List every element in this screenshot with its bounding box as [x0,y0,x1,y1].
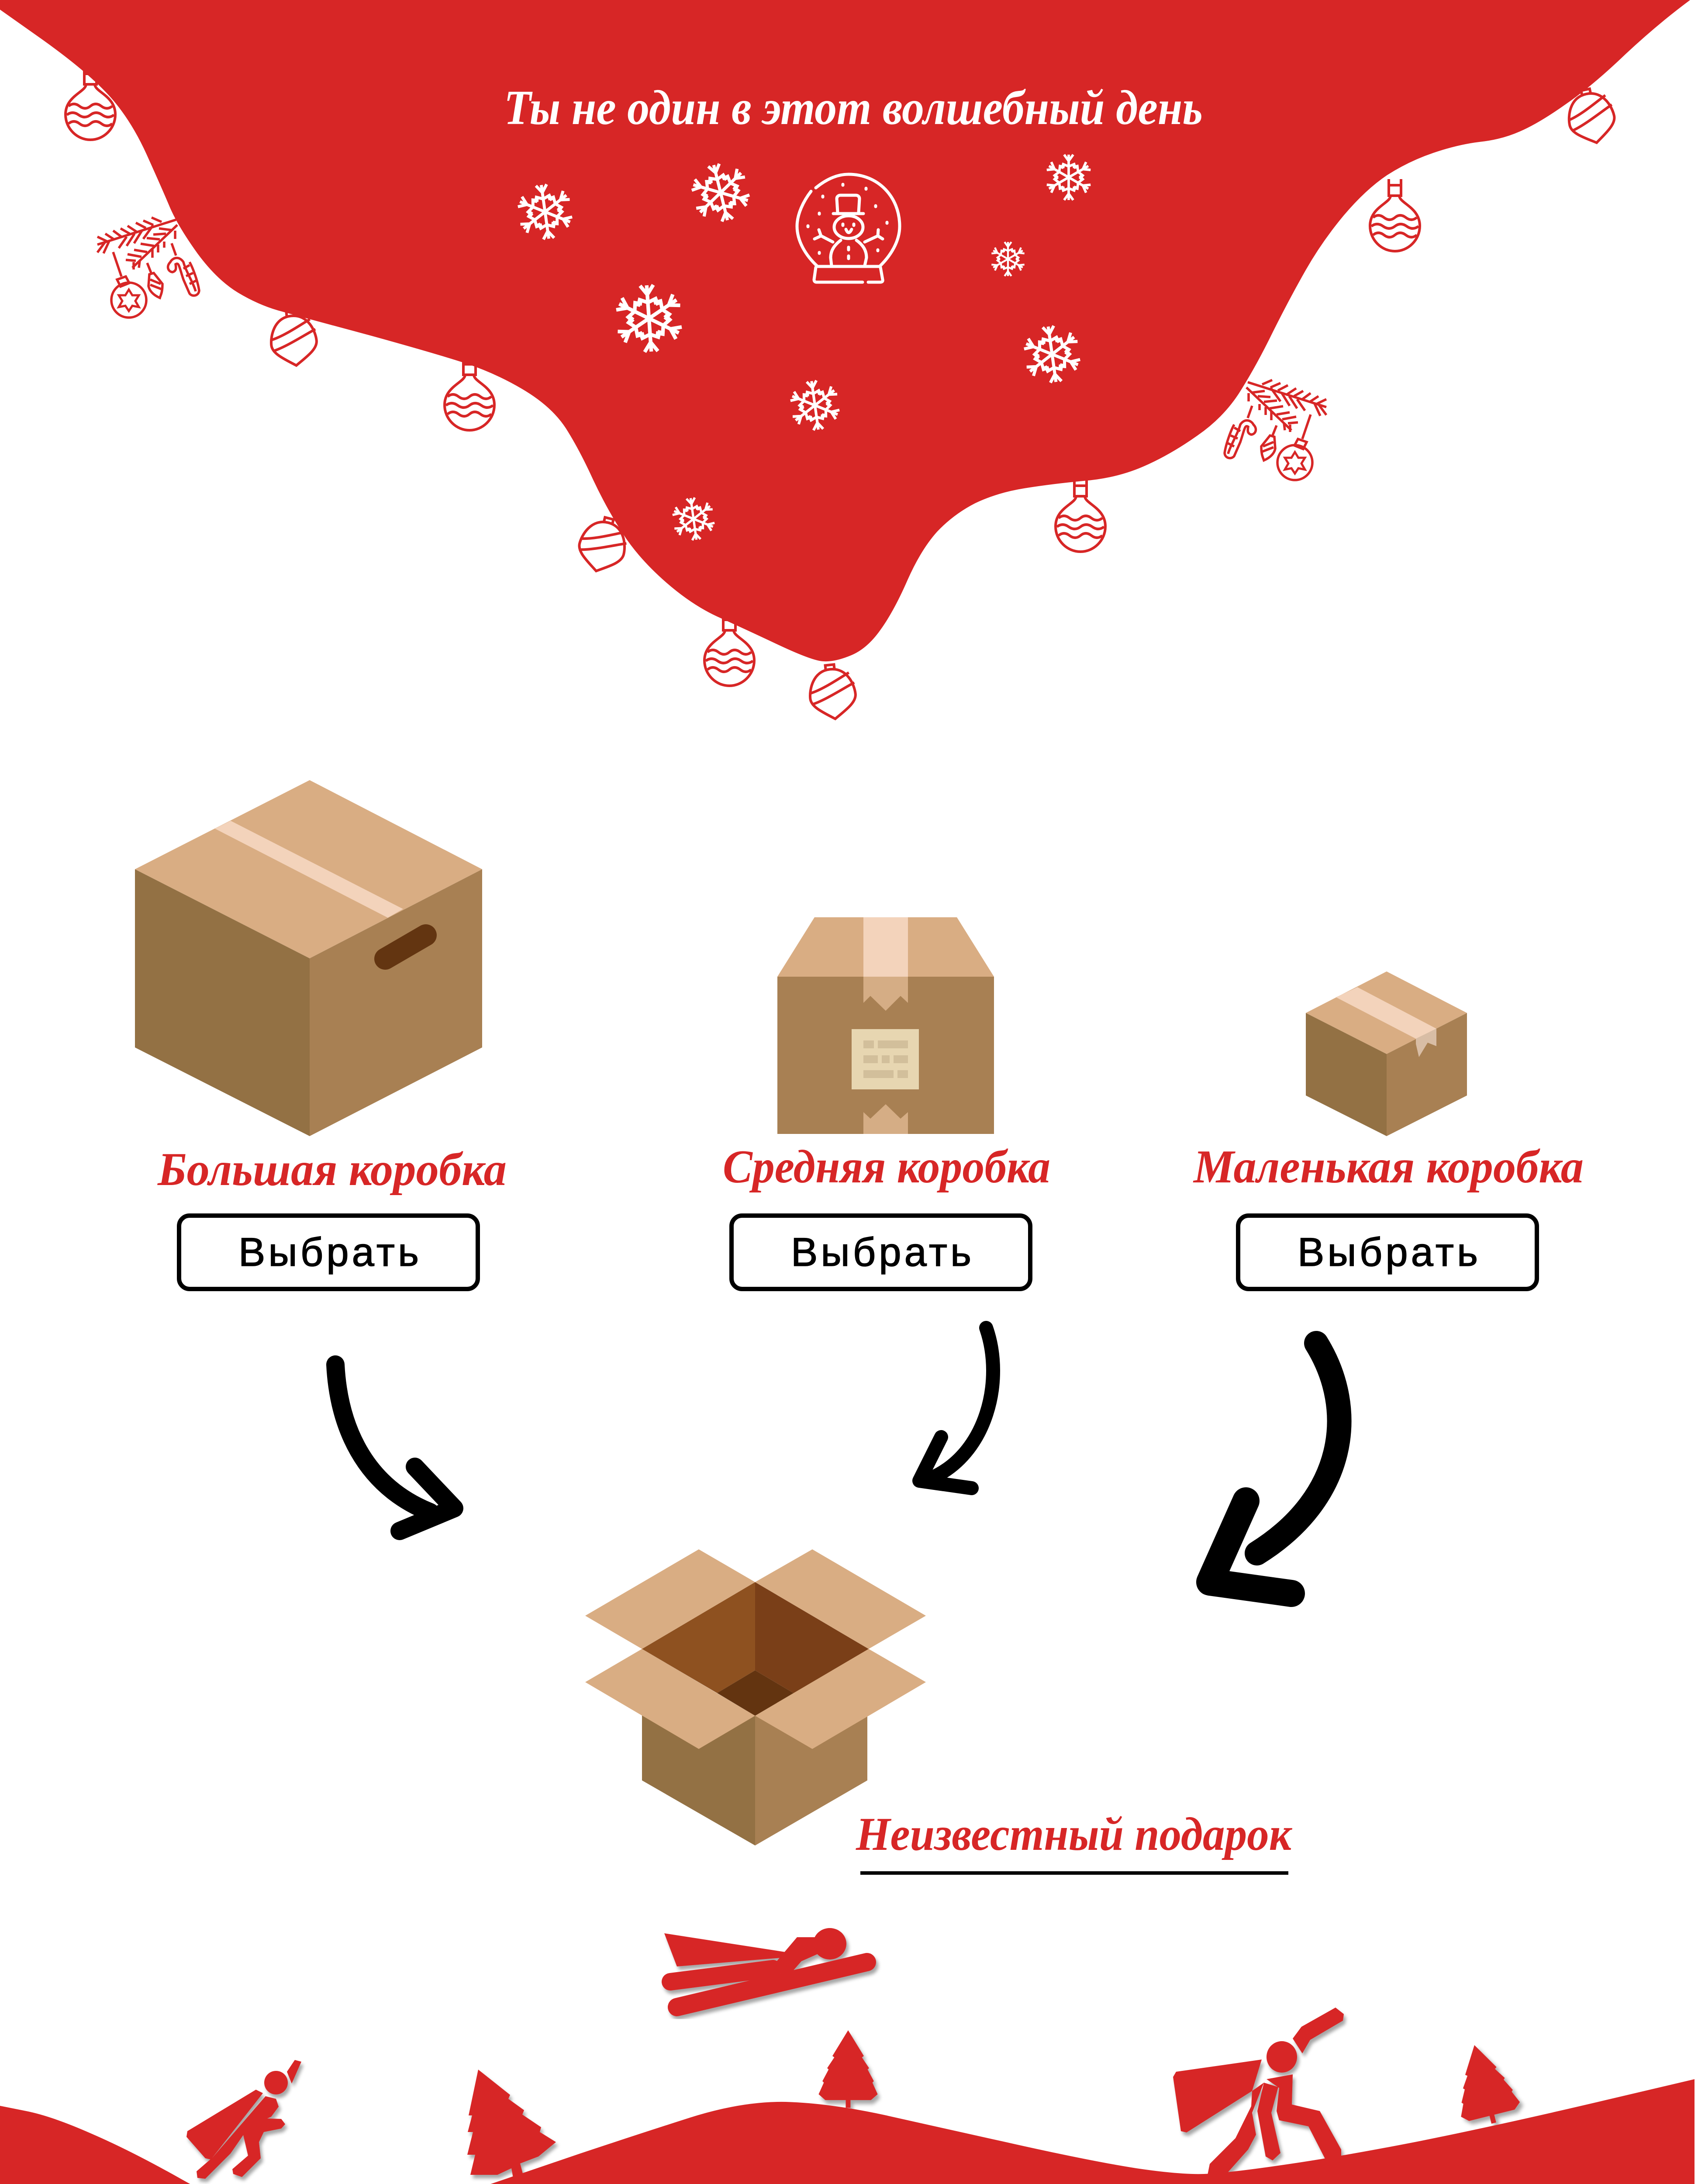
arrow: from small box [1210,1343,1339,1593]
button: medium box [732,1216,1030,1289]
underline [860,1871,1288,1875]
button: small box [1238,1216,1537,1289]
icon: walking hero with cape [1173,2008,1344,2175]
icon: red fir on top of hill [818,2030,878,2108]
hills: main red band [0,2079,1695,2184]
label: medium box: Средняя коробка [723,1141,1050,1193]
arrow: from large box [335,1365,454,1531]
ornaments: hanging balls [66,68,1619,721]
heading: top title: Ты не один в этот волшебный день [504,81,1203,135]
button: large box: Выбрать [238,1230,419,1275]
icon: left fir branch with toys [97,218,199,318]
icon: open box [585,1549,926,1845]
icon: flying hero [664,1928,867,2007]
label: small box: Маленькая коробка [1193,1141,1584,1193]
label: large box: Большая коробка [157,1144,507,1196]
icon: snow globe with snowman [797,174,900,282]
icon: medium box [777,917,994,1134]
button: small box: Выбрать [1298,1230,1478,1275]
arrow: from medium box [919,1328,993,1488]
icon: large box [135,780,482,1136]
button: medium box: Выбрать [791,1230,971,1275]
button: large box [179,1216,478,1289]
icon: red fir on right hill [1445,2038,1523,2130]
icon: small box [1306,971,1467,1136]
snowflakes [514,155,1092,543]
label: unknown gift: Неизвестный подарок [856,1808,1292,1860]
icon: right fir branch with toys [1225,380,1326,480]
icon: running hero [186,2060,301,2179]
top red curtain [0,0,1690,661]
icon: red fir on hill [467,2070,556,2178]
